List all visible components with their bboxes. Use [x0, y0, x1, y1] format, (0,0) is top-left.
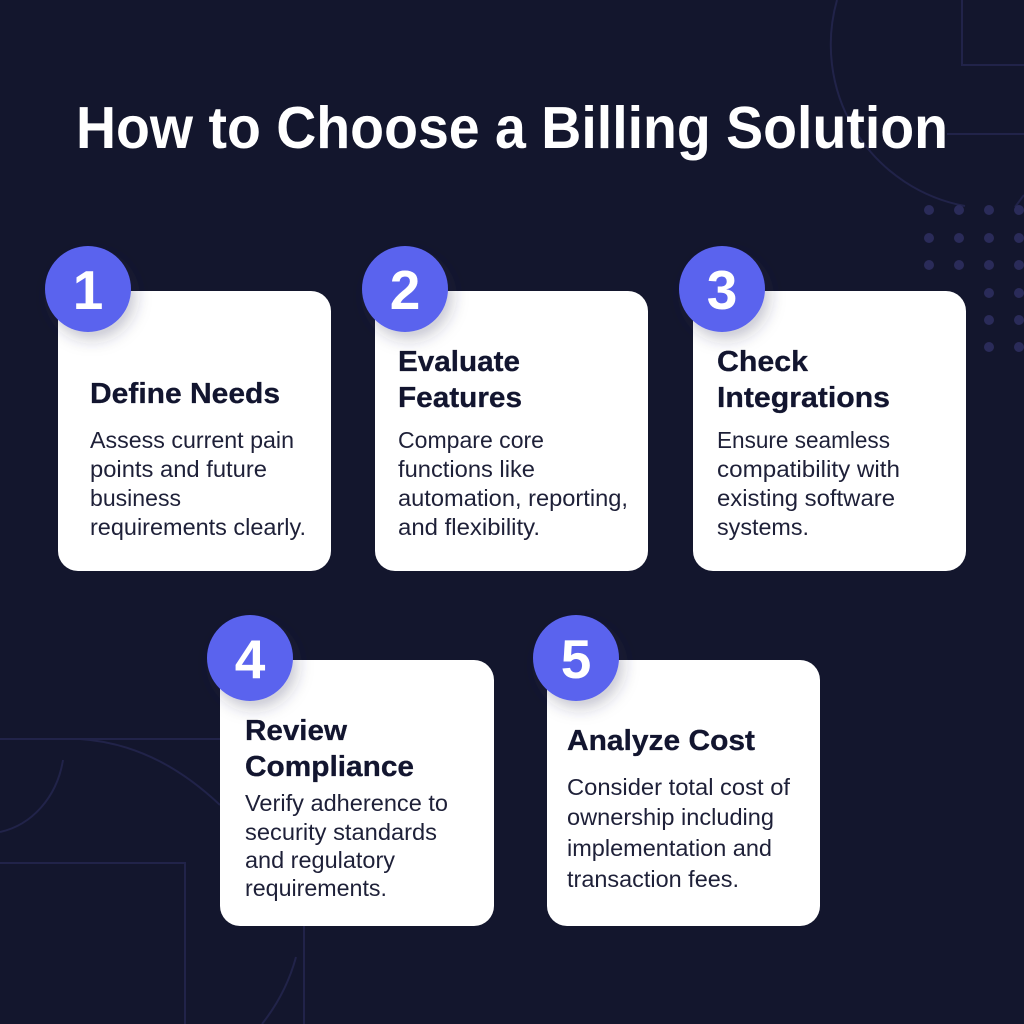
heading: define needs: Define Needs [90, 378, 280, 410]
panel: step 3 check integrations [679, 246, 966, 571]
panel: step 4 review compliance [207, 615, 494, 926]
icon: number 1 badge: 1 [73, 259, 103, 321]
text: evaluate features description [398, 427, 628, 540]
text: evaluate features description: Compare core [398, 427, 544, 453]
icon: number 5 badge [533, 615, 619, 701]
text: analyze cost description: transaction fees. [567, 866, 739, 892]
text: check integrations description [717, 427, 900, 540]
heading: review compliance: Compliance [245, 751, 414, 783]
icon: number 2 badge: 2 [390, 259, 420, 321]
panel: step 2 evaluate features [362, 246, 648, 571]
heading: evaluate features [398, 346, 522, 414]
text: evaluate features description: and flexibility. [398, 514, 540, 540]
text: check integrations description: existing software [717, 485, 895, 511]
icon: number 3 badge [679, 246, 765, 332]
heading: check integrations [717, 346, 890, 414]
text: evaluate features description: automation, reporting, [398, 485, 628, 511]
heading: check integrations: Integrations [717, 382, 890, 414]
text: analyze cost description: Consider total cost of [567, 774, 791, 800]
text: check integrations description: Ensure seamless [717, 427, 890, 453]
panel: step 5 analyze cost [533, 615, 820, 926]
text: review compliance description: security standards [245, 819, 437, 845]
text: define needs description [90, 427, 306, 540]
heading: check integrations: Check [717, 346, 809, 378]
text: define needs description: Assess current pain [90, 427, 294, 453]
text: review compliance description: and regulatory [245, 847, 396, 873]
heading: analyze cost: Analyze Cost [567, 725, 755, 757]
icon: number 2 badge [362, 246, 448, 332]
text: review compliance description: requirements. [245, 875, 387, 901]
icon: number 1 badge [45, 246, 131, 332]
heading: evaluate features: Evaluate [398, 346, 520, 378]
heading: evaluate features: Features [398, 382, 522, 414]
text: review compliance description: Verify adherence to [245, 790, 448, 816]
text: define needs description: points and future [90, 456, 267, 482]
text: analyze cost description: implementation and [567, 835, 772, 861]
text: define needs description: requirements clearly. [90, 514, 306, 540]
text: check integrations description: compatibility with [717, 456, 900, 482]
heading: review compliance: Review [245, 715, 347, 747]
icon: number 4 badge [207, 615, 293, 701]
text: analyze cost description [567, 774, 791, 892]
text: evaluate features description: functions like [398, 456, 535, 482]
text: define needs description: business [90, 485, 181, 511]
icon: number 4 badge: 4 [235, 628, 266, 690]
icon: number 5 badge: 5 [561, 628, 591, 690]
text: review compliance description [245, 790, 448, 901]
text: analyze cost description: ownership including [567, 804, 774, 830]
heading: review compliance [245, 715, 414, 783]
panel: step 1 define needs [45, 246, 331, 571]
text: check integrations description: systems. [717, 514, 809, 540]
icon: number 3 badge: 3 [707, 259, 737, 321]
title: How to Choose a Billing Solution [76, 95, 948, 161]
